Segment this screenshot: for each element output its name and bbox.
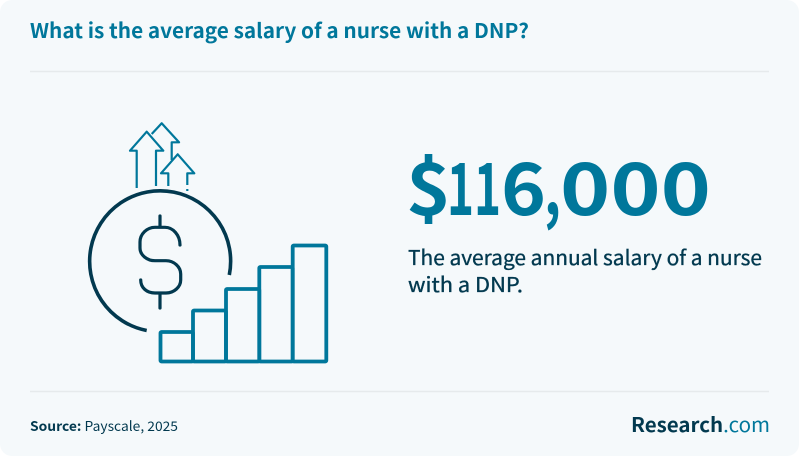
title: What is the average salary of a nurse with a DNP?	[30, 14, 529, 44]
big number	[406, 131, 711, 236]
icon: growth arrows	[130, 123, 194, 191]
icon: coin circle	[90, 191, 231, 330]
bar chart icon	[160, 246, 326, 362]
icon: salary growth illustration	[90, 123, 326, 362]
logo: Research.com: Research.com	[631, 409, 770, 438]
big number: 000	[560, 131, 711, 236]
description text: with a DNP.	[408, 268, 523, 298]
icon: dollar sign	[140, 216, 181, 308]
big number: $	[406, 131, 451, 236]
big number: 6	[501, 131, 546, 236]
big number: ,	[544, 131, 561, 236]
big number: 11	[447, 131, 501, 236]
description text: The average annual salary of a nurse	[408, 241, 762, 271]
description text	[408, 241, 762, 298]
source note: Source: Payscale, 2025	[30, 415, 178, 435]
